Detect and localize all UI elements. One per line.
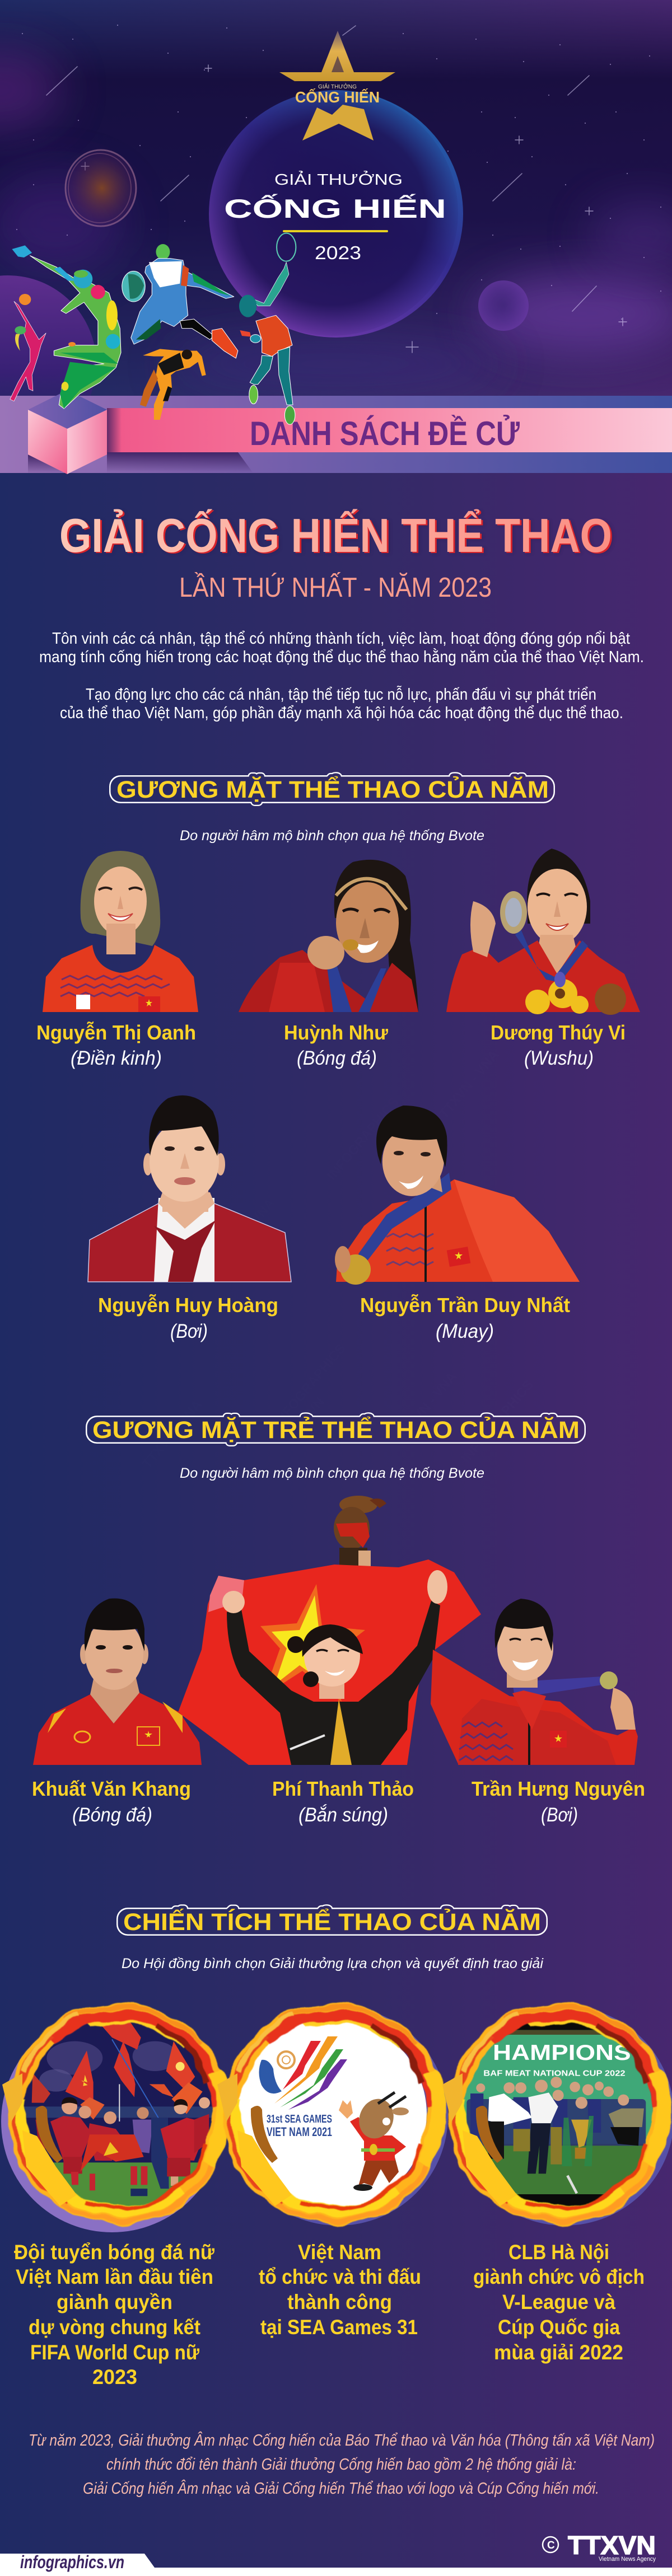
names row 2: Nguyễn Trần Duy Nhất [360,1294,570,1317]
closing note [29,2431,655,2498]
names row 3: Phí Thanh Thảo [272,1777,414,1800]
athlete: basketball player [122,244,238,358]
caption: Do Hội đồng bình chọn Giải thưởng lựa chọn và quyết định trao giải [122,1956,544,1971]
achievement 1 text: Việt Nam lần đầu tiên [16,2265,213,2288]
achievement 1 text: giành quyền [57,2291,172,2313]
watermarks: INFOGRAPHICS [459,1378,536,1466]
names row 1: Nguyễn Thị Oanh [36,1021,196,1044]
footer strip with site name [0,2552,672,2576]
closing note: chính thức đổi tên thành Giải thưởng Cống hiến bao gồm 2 hệ thống giải là: [106,2456,576,2474]
names row 2: Nguyễn Huy Hoàng [98,1294,278,1317]
intro text: của thể thao Việt Nam, góp phần đẩy mạnh xã hội hóa các hoạt động thể dục thể thao. [60,704,623,722]
names row 3: (Bóng đá) [72,1804,152,1826]
portrait: Nguyễn Trần Duy Nhất [335,1106,580,1285]
logo: gold star [279,31,395,140]
achievement 3 text: giành chức vô địch [473,2265,645,2288]
achievement 2 text [259,2241,421,2339]
portrait: Khuất Văn Khang [33,1598,202,1765]
names row 3: Khuất Văn Khang [32,1777,191,1800]
section heading: chiến tích: CHIẾN TÍCH THỂ THAO CỦA NĂM [123,1908,541,1936]
achievement 2 text: Việt Nam [298,2241,381,2264]
names row 1 [36,1021,626,1069]
achievement 3 text: mùa giải 2022 [494,2341,623,2364]
hero title: CỐNG HIẾN [224,194,446,223]
banner: danh sách đề cử [0,390,672,474]
achievement 1 text: FIFA World Cup nữ [30,2341,199,2364]
banner: danh sách đề cử: DANH SÁCH ĐỀ CỬ [250,415,520,452]
athlete: tennis player [239,233,296,424]
planet: lower left [0,275,96,452]
TTXVN logo: Vietnam News Agency [599,2556,656,2563]
names row 3: (Bắn súng) [298,1804,388,1826]
watermarks: INFOGRAPHICS [324,1095,402,1183]
logo: gold star: GIẢI THƯỞNG [318,83,357,90]
portrait: Dương Thúy Vi [446,849,640,1015]
achievement 3 text: V-League và [502,2291,615,2313]
mascot [339,2092,409,2191]
section heading: gương mặt thể thao của năm: GƯƠNG MẶT THỂ THAO CỦA NĂM [116,776,549,803]
names row 2: (Muay) [436,1320,494,1342]
TTXVN logo: C [547,2540,555,2551]
achievement 3 text: CLB Hà Nội [508,2241,609,2264]
shooting stars [46,26,596,311]
watermarks: TTXVN [288,1394,328,1438]
achievement 2: flame ring with SEA Games logo: 31st SEA GAMES [267,2113,332,2125]
achievement 3 text: Cúp Quốc gia [498,2316,620,2339]
watermarks: TTXVN - VNA [436,1047,502,1122]
mascot plush [334,1496,386,1566]
intro text [39,630,644,722]
logo: gold star: CỐNG HIẾN [295,88,380,106]
section heading: chiến tích: CHIẾN TÍCH THỂ THAO CỦA NĂM [123,1908,541,1936]
names row 1: Huỳnh Như [284,1021,389,1044]
hero title [224,170,446,263]
athletes illustration [10,233,296,424]
portrait: Nguyễn Huy Hoàng [88,1095,291,1282]
section heading: gương mặt thể thao của năm: GƯƠNG MẶT THỂ THAO CỦA NĂM [116,776,549,803]
athlete: green jumper [12,245,121,409]
achievement 1: flame ring with women's team photo [1,2006,223,2232]
hero title: GIẢI THƯỞNG [274,170,403,188]
names row 3 [32,1777,645,1826]
names row 3: Trần Hưng Nguyên [472,1777,645,1800]
achievement 2: flame ring with SEA Games logo: VIET NAM 2021 [267,2125,332,2139]
achievement 2 text: tại SEA Games 31 [260,2316,418,2339]
section heading: gương mặt trẻ: GƯƠNG MẶT TRẺ THỂ THAO CỦA NĂM [92,1416,580,1444]
planet: small right [478,280,529,331]
hero title: 2023 [315,242,361,263]
portrait: Huỳnh Như [239,860,418,1012]
achievement 3 text [473,2241,645,2364]
TTXVN logo [543,2531,656,2563]
achievement 2 text: tổ chức và thi đấu [259,2265,421,2288]
achievement 3: flame ring with Hà Nội FC photo: BAF MEAT NATIONAL CUP 2022 [483,2068,626,2078]
athlete: volleyball girl [10,294,46,401]
watermarks [139,1047,536,1472]
intro text: Tôn vinh các cá nhân, tập thể có những thành tích, việc làm, hoạt động đóng góp nổi bật [52,630,630,648]
achievement 2: flame ring with SEA Games logo [217,2006,448,2226]
achievement 2 text: thành công [287,2291,392,2313]
names row 1: (Wushu) [524,1047,594,1069]
subheading: LẦN THỨ NHẤT - NĂM 2023 [179,573,492,603]
names row 1: (Bóng đá) [297,1047,377,1069]
names row 2 [98,1294,570,1342]
section heading: gương mặt trẻ: GƯƠNG MẶT TRẺ THỂ THAO CỦA NĂM [92,1416,580,1444]
caption: Do người hâm mộ bình chọn qua hệ thống Bvote [180,828,484,844]
watermarks: TTXVN - VNA [394,1369,460,1444]
names row 1: Dương Thúy Vi [491,1021,626,1044]
athlete: runner [140,349,206,420]
footer strip with site name: infographics.vn [20,2552,124,2572]
watermarks: TTXVN - VNA [139,1397,205,1472]
section heading: gương mặt thể thao của năm: GƯƠNG MẶT THỂ THAO CỦA NĂM [116,776,549,803]
portrait: Phí Thanh Thảo with flag and mascot [178,1496,481,1765]
achievement 3: flame ring with Hà Nội FC photo: HAMPIONS [493,2040,631,2065]
section heading: gương mặt trẻ: GƯƠNG MẶT TRẺ THỂ THAO CỦA NĂM [92,1416,580,1444]
achievement 1 text [14,2241,214,2388]
planet: ringed nebula [66,150,137,226]
achievement 1 text: Đội tuyển bóng đá nữ [14,2241,214,2264]
watermarks: TTXVN - VNA [212,1196,278,1270]
section heading: chiến tích: CHIẾN TÍCH THỂ THAO CỦA NĂM [123,1908,541,1936]
names row 3: (Bơi) [541,1804,578,1826]
hero: space background [0,0,672,396]
names row 2: (Bơi) [170,1320,208,1342]
portrait: Trần Hưng Nguyên [431,1599,638,1765]
names row 1: (Điền kinh) [71,1047,162,1069]
achievement 1 text: 2023 [92,2366,137,2388]
achievement 1 text: dự vòng chung kết [29,2316,200,2339]
portrait: Nguyễn Thị Oanh [43,851,198,1012]
SEA Games logo [259,2036,347,2110]
achievement 3: flame ring with Hà Nội FC photo [442,2006,672,2226]
intro text: Tạo động lực cho các cá nhân, tập thể tiếp tục nỗ lực, phấn đấu vì sự phát triển [86,685,596,704]
TTXVN logo: TTXVN [568,2531,656,2560]
watermarks: INFOGRAPHICS [271,1341,349,1430]
planet: big globe [205,90,463,338]
caption: Do người hâm mộ bình chọn qua hệ thống Bvote [180,1465,484,1481]
